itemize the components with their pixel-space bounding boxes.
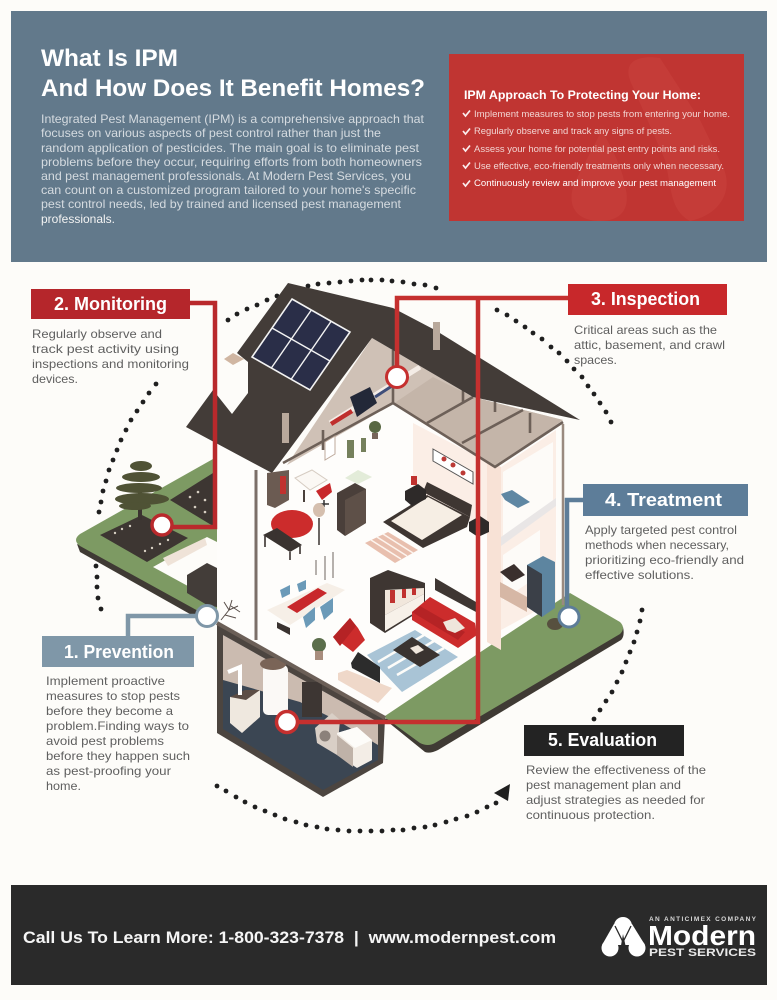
potted plant <box>312 638 326 652</box>
dotted cycle: top left to top <box>226 278 438 322</box>
water heater <box>263 665 288 715</box>
intro paragraph: random application of pesticides. The main goal is to eliminate pest <box>41 141 420 155</box>
prevention text <box>46 674 190 793</box>
evaluation text: Review the effectiveness of the <box>526 763 706 777</box>
logo: AN ANTICIMEX COMPANY <box>649 916 757 923</box>
red armchair <box>333 618 365 652</box>
bath mat <box>501 490 530 508</box>
marker: basement <box>276 712 298 732</box>
panel: IPM approach: IPM Approach To Protecting Your Home: <box>464 89 701 102</box>
floor lamp <box>318 518 320 545</box>
utility counter <box>337 727 372 768</box>
washer <box>315 713 340 755</box>
outer wall edges <box>254 470 258 640</box>
dotted cycle: left <box>94 382 158 611</box>
TV <box>351 652 380 683</box>
footer <box>11 885 767 985</box>
logo: PEST SERVICES <box>649 947 756 959</box>
monitoring text: inspections and monitoring <box>32 357 189 371</box>
step 5: evaluation <box>524 725 706 822</box>
bookshelf <box>267 470 289 508</box>
checklist: Implement measures to stop pests from entering your home. <box>474 109 730 120</box>
watermark logo drops <box>571 57 727 221</box>
monitoring text <box>32 327 189 386</box>
intro paragraph: problems before they occur, requiring efforts from both homeowners <box>41 155 422 169</box>
dotted cycle: lower right <box>592 608 644 721</box>
treatment text: prioritizing eco-friendly and <box>585 553 744 567</box>
picture frame <box>325 436 335 460</box>
desk <box>295 470 327 490</box>
monitoring text: devices. <box>32 372 78 386</box>
intro paragraph: professionals. <box>41 212 115 226</box>
tree <box>115 461 169 520</box>
evaluation text <box>526 763 706 822</box>
treatment text <box>585 523 744 582</box>
step 3: inspection <box>568 284 727 367</box>
dining area <box>267 552 345 660</box>
coffee table <box>393 637 440 667</box>
prevention text: before they become a <box>46 704 173 718</box>
inspection text: Critical areas such as the <box>574 323 717 337</box>
intro paragraph: and pest management professionals. At Modern Pest Services, you <box>41 169 411 183</box>
wall plants <box>347 440 354 458</box>
headboard art <box>433 449 473 484</box>
panel: IPM approach <box>449 54 744 221</box>
evaluation text: adjust strategies as needed for <box>526 793 705 807</box>
bathroom and kitchen wall <box>501 430 556 630</box>
monitoring text: track pest activity using <box>32 342 179 356</box>
prevention text: home. <box>46 779 81 793</box>
intro paragraph: Integrated Pest Management (IPM) is a comprehensive approach that <box>41 112 425 126</box>
marker: monitoring <box>152 515 172 535</box>
panel: header <box>11 11 767 262</box>
step 2: monitoring: 2. Monitoring <box>54 294 167 314</box>
prevention text: measures to stop pests <box>46 689 180 703</box>
prevention text: avoid pest problems <box>46 734 164 748</box>
fridge <box>527 556 555 617</box>
step 2: monitoring <box>31 289 190 386</box>
small dark table <box>263 528 302 552</box>
evaluation text: pest management plan and <box>526 778 681 792</box>
title <box>41 45 425 102</box>
connector: prevention <box>128 616 198 637</box>
pale floor mat <box>345 470 372 484</box>
prevention text: as pest-proofing your <box>46 764 171 778</box>
ventilation duct <box>330 367 420 423</box>
dotted cycle: top right <box>495 308 613 424</box>
title: And How Does It Benefit Homes? <box>41 75 425 102</box>
roof <box>186 283 580 473</box>
crack <box>221 600 240 620</box>
roof pipes <box>282 413 289 443</box>
outdoor AC unit <box>187 563 217 607</box>
nightstand left <box>405 484 426 506</box>
garden plate left <box>76 459 217 618</box>
connector: monitoring <box>172 303 215 527</box>
connector: treatment <box>567 500 585 608</box>
logo: Modern <box>648 920 756 951</box>
red round rug <box>271 510 313 538</box>
bookshelf <box>370 570 425 633</box>
inspection text <box>574 323 725 367</box>
step 3: inspection: 3. Inspection <box>591 289 700 309</box>
step 1: prevention <box>42 636 194 793</box>
upper left room <box>263 421 381 560</box>
living room <box>333 570 477 703</box>
checklist: Continuously review and improve your pest management <box>474 178 716 189</box>
intro paragraph: focuses on various aspects of pest control rather than just the <box>41 126 381 140</box>
bedroom <box>365 449 489 563</box>
blue striped rug <box>367 630 458 692</box>
attic <box>283 338 563 467</box>
treatment text: methods when necessary, <box>585 538 729 552</box>
prevention text: Implement proactive <box>46 674 165 688</box>
intro paragraph: can count on a customized program tailored to your home's specific <box>41 183 416 197</box>
small roof vent <box>224 353 244 365</box>
TV stand <box>338 670 392 703</box>
marker: inspection <box>386 366 408 388</box>
title: What Is IPM <box>41 45 178 72</box>
monitoring text: Regularly observe and <box>32 327 162 341</box>
blue chairs <box>280 585 290 598</box>
prevention text: problem.Finding ways to <box>46 719 189 733</box>
intro paragraph <box>41 112 425 226</box>
prevention text: before they happen such <box>46 749 190 763</box>
back right wall <box>413 423 497 535</box>
wardrobe <box>337 483 366 536</box>
logo <box>602 916 757 959</box>
step 4: treatment: 4. Treatment <box>605 490 722 510</box>
connector: inspection and basement <box>297 298 570 722</box>
step 5: evaluation: 5. Evaluation <box>548 730 657 750</box>
inspection text: spaces. <box>574 353 617 367</box>
step 1: prevention: 1. Prevention <box>64 642 174 662</box>
treatment text: effective solutions. <box>585 568 694 582</box>
garden plate right <box>383 593 624 753</box>
marker: prevention <box>196 606 218 626</box>
peach wall column <box>487 460 501 650</box>
tank <box>302 682 322 717</box>
interior floor and walls <box>217 404 563 718</box>
basement <box>217 623 385 797</box>
treatment text: Apply targeted pest control <box>585 523 737 537</box>
dotted cycle: bottom arrow <box>215 784 510 833</box>
checklist <box>463 109 730 189</box>
footer contact line: Call Us To Learn More: 1-800-323-7378 | www.modernpest.com <box>23 928 556 947</box>
step 4: treatment <box>583 484 748 582</box>
boiler <box>230 690 260 733</box>
checklist: Use effective, eco-friendly treatments only when necessary. <box>474 161 724 172</box>
solar panels <box>252 299 350 390</box>
floor edge <box>217 623 385 718</box>
kitchen <box>435 556 555 617</box>
red sofa <box>412 597 477 648</box>
house illustration <box>76 283 624 797</box>
checklist: Regularly observe and track any signs of pests. <box>474 126 672 137</box>
intro paragraph: pest control needs, led by trained and licensed pest management <box>41 197 402 211</box>
red desk chair <box>316 483 332 500</box>
garden beds <box>100 515 188 562</box>
bedroom rug <box>365 532 418 563</box>
bench <box>163 538 207 566</box>
inspection text: attic, basement, and crawl <box>574 338 725 352</box>
evaluation text: continuous protection. <box>526 808 655 822</box>
checklist: Assess your home for potential pest entry points and risks. <box>474 144 720 155</box>
nightstand right <box>469 516 489 537</box>
marker: treatment <box>559 607 579 627</box>
